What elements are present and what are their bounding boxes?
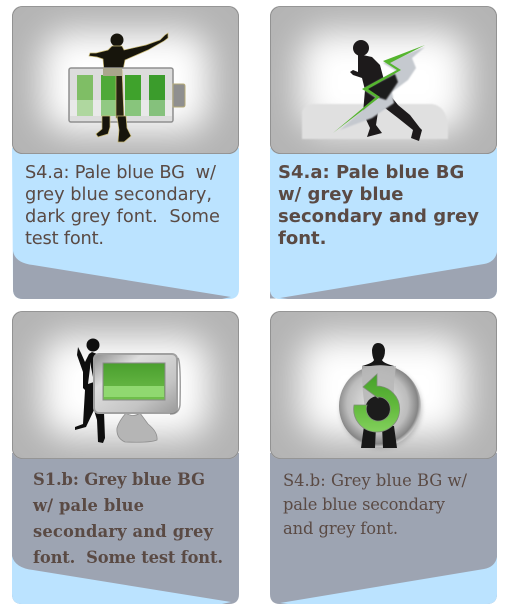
card body: pale blue (12, 148, 239, 299)
text block: secondary and grey (278, 206, 479, 227)
text block: w/ pale blue (32, 496, 144, 515)
text block (278, 162, 479, 249)
text block: font. Some test font. (33, 548, 223, 567)
secondary wedge: pale blue (12, 556, 231, 604)
panel: S4.a bold sans card (270, 6, 497, 299)
text block: grey blue secondary, (25, 184, 212, 205)
panel: S1.b bold serif card (12, 311, 239, 604)
secondary wedge: pale blue (280, 557, 497, 604)
image panel (12, 6, 239, 154)
icon: person and refresh sphere (339, 343, 422, 449)
text block: S4.b: Grey blue BG w/ (283, 471, 468, 490)
monitor stand (117, 413, 157, 442)
image panel (270, 311, 497, 459)
text block: S1.b: Grey blue BG (33, 470, 205, 489)
text block: dark grey font. Some (25, 206, 220, 227)
icon: person and battery (69, 33, 185, 142)
text block (32, 470, 223, 567)
text block: and grey font. (283, 519, 398, 538)
text block (283, 471, 468, 538)
text block: S4.a: Pale blue BG (278, 162, 464, 183)
text block: S4.a: Pale blue BG w/ (25, 162, 216, 183)
secondary wedge: grey blue (13, 251, 231, 299)
card body: grey blue (270, 453, 497, 604)
panel: S4.b regular serif card (270, 311, 497, 604)
icon: runner and lightning (333, 40, 425, 141)
text block: secondary and grey (33, 522, 214, 541)
card body: pale blue (270, 148, 497, 299)
secondary wedge: grey blue (270, 252, 497, 299)
text block (25, 162, 220, 249)
image panel (12, 311, 239, 459)
image panel (270, 6, 497, 154)
panel: S4.a regular sans card (12, 6, 239, 299)
icon: businessman and monitor (75, 338, 180, 443)
text block: font. (278, 228, 326, 249)
text block: w/ grey blue (278, 184, 404, 205)
card body: grey blue (12, 453, 239, 604)
ground band (302, 104, 448, 139)
text block: test font. (25, 228, 104, 249)
text block: pale blue secondary (283, 495, 446, 514)
